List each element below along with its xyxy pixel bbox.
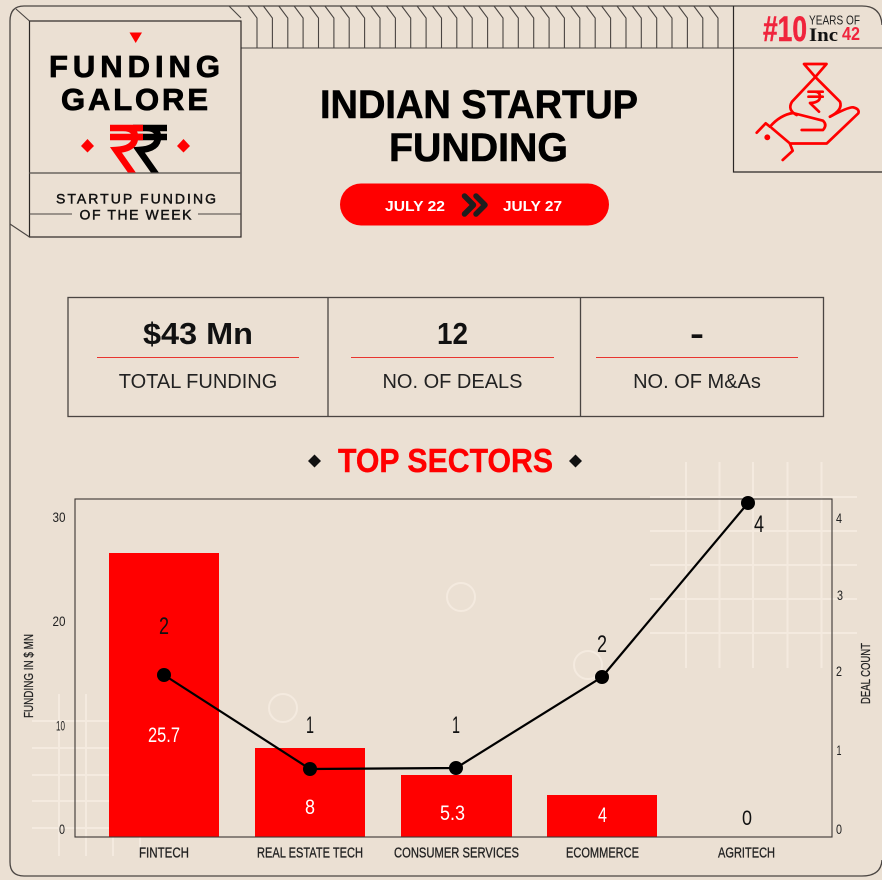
- stat: total funding: [97, 316, 299, 393]
- stats panel: [68, 298, 824, 416]
- left axis ticks: 20: [52, 613, 66, 629]
- icon: hand holding money bag: [757, 64, 859, 160]
- main title: FUNDING: [389, 126, 568, 170]
- subtitle line two: OF THE WEEK: [80, 206, 192, 222]
- deal count labels: 4: [754, 511, 764, 538]
- deal count labels: 1: [306, 712, 314, 739]
- stat: deals: NO. OF DEALS: [382, 371, 523, 393]
- category labels: AGRITECH: [718, 846, 775, 862]
- funding galore badge: [10, 9, 241, 237]
- left axis title: FUNDING IN $ MN: [21, 634, 36, 718]
- main title: [320, 83, 638, 170]
- date pill: JULY 27: [503, 198, 562, 215]
- right axis ticks: 1: [836, 742, 842, 758]
- bar values: [148, 724, 752, 830]
- header tick pattern: [229, 6, 882, 48]
- right axis title: DEAL COUNT: [858, 643, 873, 704]
- date pill: JULY 22: [385, 198, 445, 215]
- left axis ticks: [52, 509, 66, 837]
- category labels: CONSUMER SERVICES: [394, 846, 519, 862]
- right axis ticks: 3: [837, 587, 843, 603]
- category labels: ECOMMERCE: [566, 846, 639, 862]
- bar values: 25.7: [148, 724, 180, 747]
- badge title: funding: FUNDING: [49, 49, 220, 84]
- deal count labels: 2: [597, 631, 607, 658]
- right axis ticks: 2: [836, 663, 842, 679]
- red diamond left: [81, 139, 94, 152]
- right axis ticks: 0: [836, 821, 842, 837]
- deal count labels: 2: [159, 613, 169, 640]
- main title: INDIAN STARTUP: [320, 83, 638, 127]
- icon: double rupee: [110, 128, 167, 177]
- logo: years of: YEARS OF: [809, 14, 860, 28]
- date pill: [340, 184, 609, 226]
- bars: [109, 553, 657, 836]
- logo: inc42: 42: [842, 24, 860, 44]
- badge title: galore: GALORE: [61, 82, 208, 117]
- bar values: 4: [598, 804, 607, 827]
- deal count labels: 1: [452, 712, 460, 739]
- stat: m&a: -: [690, 316, 704, 351]
- category labels: [139, 846, 775, 862]
- left axis ticks: 30: [52, 509, 66, 525]
- right axis ticks: [836, 510, 843, 837]
- logo: inc42: Inc: [809, 25, 838, 46]
- bar values: 8: [305, 796, 315, 819]
- deal count labels: [159, 511, 764, 739]
- section heading: TOP SECTORS: [338, 442, 553, 479]
- red diamond right: [177, 139, 190, 152]
- logo: #10: #10: [763, 10, 807, 49]
- icon: double chevron: [464, 196, 485, 214]
- stat: total funding: $43 Mn: [143, 316, 253, 351]
- right axis ticks: 4: [836, 510, 842, 526]
- left axis ticks: 0: [59, 821, 65, 837]
- stat: m&a: [596, 316, 798, 393]
- stat: total funding: TOTAL FUNDING: [119, 371, 277, 393]
- deal count line: [157, 496, 755, 776]
- logo box: [734, 6, 882, 172]
- category labels: REAL ESTATE TECH: [257, 846, 363, 862]
- left axis ticks: 10: [56, 718, 65, 734]
- bar values: 0: [742, 807, 752, 830]
- stat: deals: 12: [437, 316, 468, 351]
- stat: deals: [351, 316, 554, 393]
- chart: [21, 496, 873, 862]
- icon: red triangle: [130, 32, 142, 43]
- stat: m&a: NO. OF M&As: [633, 371, 761, 393]
- subtitle line one: STARTUP FUNDING: [56, 190, 216, 206]
- logo: inc42: [809, 24, 860, 46]
- category labels: FINTECH: [139, 846, 189, 862]
- bar values: 5.3: [440, 802, 465, 825]
